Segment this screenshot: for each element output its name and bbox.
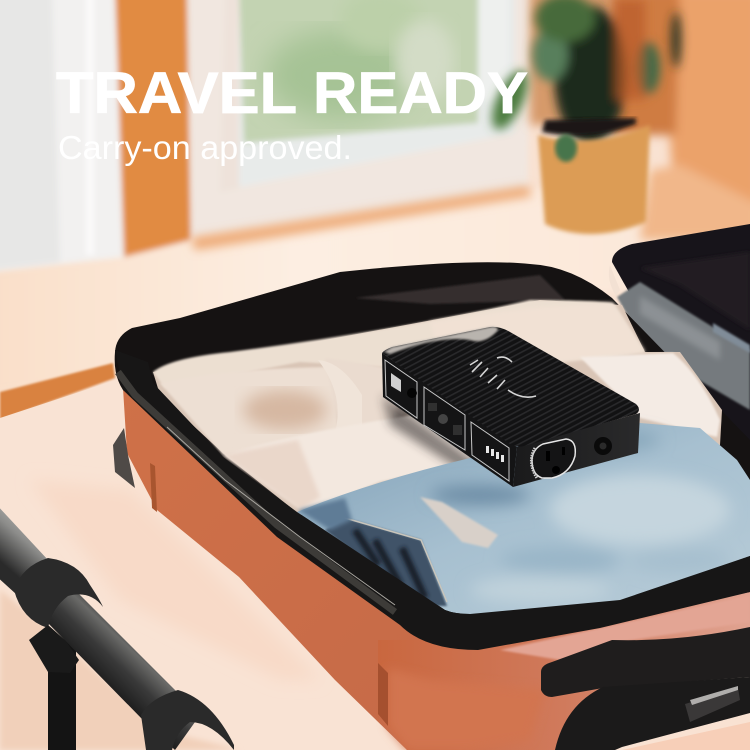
title: TRAVEL READY xyxy=(56,61,528,126)
clothes underlay xyxy=(153,300,722,515)
rail collar right xyxy=(141,690,234,750)
device front left face xyxy=(382,353,517,487)
folded clothes xyxy=(153,300,722,515)
power station device xyxy=(382,327,640,487)
bracket xyxy=(29,625,79,673)
lid lining xyxy=(617,282,750,410)
left side of shell xyxy=(123,388,430,750)
suitcase black rim and interior xyxy=(115,262,750,640)
orange column xyxy=(115,0,191,257)
rail collar left xyxy=(14,558,103,628)
ac outlet xyxy=(532,439,575,478)
middle rolled shirt xyxy=(160,367,338,455)
ports panels xyxy=(385,360,509,481)
top beige shirt xyxy=(153,300,645,388)
window sill xyxy=(0,168,750,392)
open suitcase lid xyxy=(609,224,750,470)
icon: potted plant xyxy=(485,0,681,234)
metal bed rail xyxy=(0,503,234,750)
corner and front of shell xyxy=(378,580,750,750)
jeans tear xyxy=(420,497,498,548)
sill shadow under frame xyxy=(191,186,532,250)
left white window xyxy=(0,0,124,272)
right white shirt xyxy=(580,353,720,437)
subtitle: Carry-on approved. xyxy=(58,129,352,166)
bed with cream bedding xyxy=(0,363,750,750)
lower shirt xyxy=(223,414,470,512)
handle xyxy=(541,627,750,750)
blue jeans xyxy=(297,423,750,615)
device top xyxy=(382,327,639,447)
dc port xyxy=(594,437,612,455)
device logo xyxy=(470,357,536,397)
green view xyxy=(239,0,478,143)
device right face xyxy=(513,413,640,487)
side seam xyxy=(378,663,388,726)
main window frame xyxy=(187,0,530,238)
front black rim xyxy=(115,350,750,650)
luggage foot xyxy=(113,428,135,488)
pot xyxy=(538,125,650,234)
shadow under device xyxy=(382,395,640,505)
warm wall xyxy=(660,0,750,205)
suitcase shell xyxy=(113,388,750,750)
window pane xyxy=(239,0,514,187)
jeans pocket xyxy=(325,518,447,606)
orange floor of window ledge xyxy=(640,165,750,240)
